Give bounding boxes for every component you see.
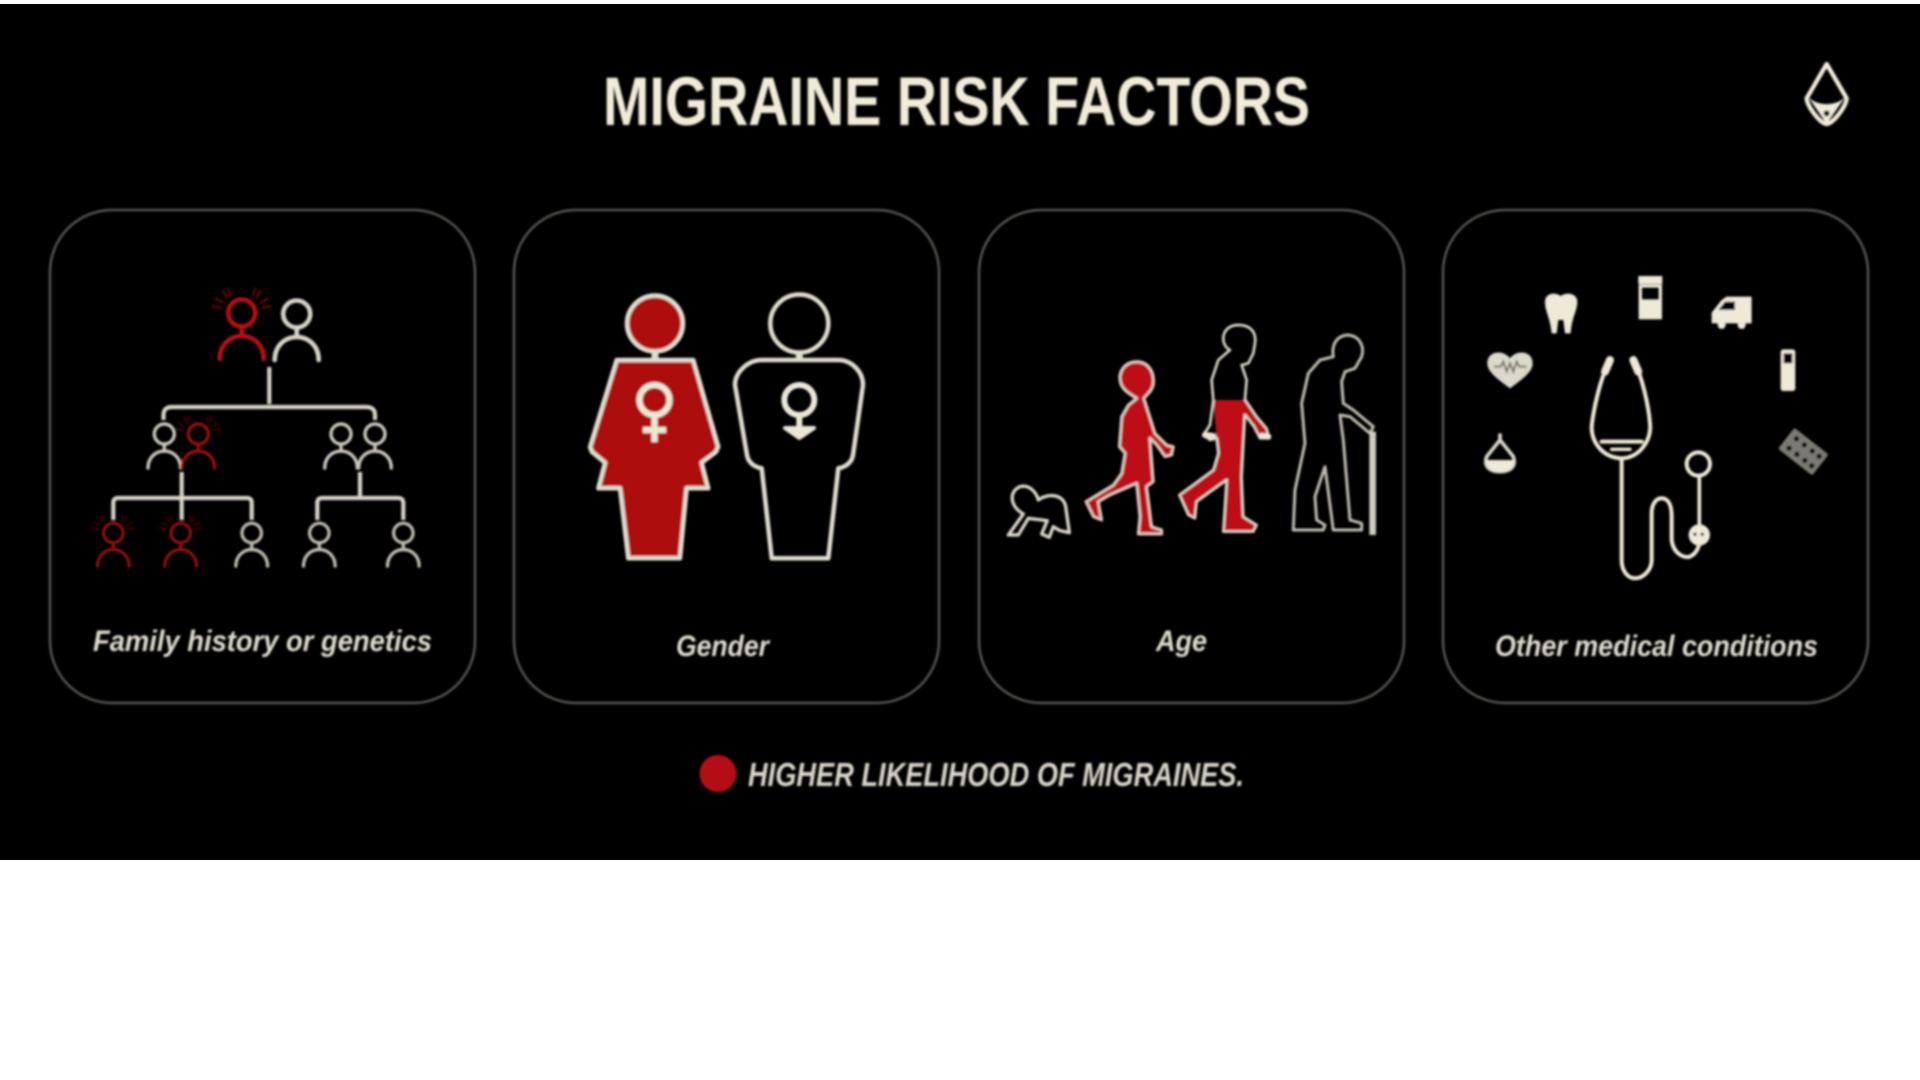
- icon: medicine bottle: [1638, 276, 1662, 318]
- icon: tooth: [1545, 294, 1577, 333]
- label: Gender: [676, 630, 771, 663]
- legend: [700, 755, 1244, 793]
- figure: adult: [1179, 325, 1269, 532]
- person: grandchildren: [236, 523, 419, 566]
- figure: elder with cane: [1293, 335, 1373, 535]
- icon: vial: [1781, 349, 1795, 391]
- symbol: mars: [784, 385, 814, 438]
- icon: flask: [1486, 433, 1514, 472]
- icon: ambulance: [1712, 297, 1752, 329]
- family tree icon: [92, 288, 419, 566]
- person: affected grandchildren: [92, 515, 202, 566]
- tree connectors: [113, 367, 403, 520]
- symbol: venus: [640, 385, 670, 442]
- person: affected parent: [212, 288, 272, 359]
- panel: other medical conditions: [1443, 210, 1868, 703]
- panel frame: [514, 210, 939, 703]
- background band: [0, 4, 1920, 860]
- panel: family history: [50, 210, 475, 703]
- figure: male: [735, 294, 863, 558]
- life stages icon: [1008, 325, 1373, 537]
- figure: female: [590, 296, 718, 558]
- panel: gender: [514, 210, 939, 703]
- person: parent: [275, 300, 319, 360]
- label: Other medical conditions: [1495, 630, 1818, 663]
- label: Age: [1155, 625, 1207, 658]
- medical icons: [1486, 276, 1829, 578]
- panel frame: [50, 210, 475, 703]
- title: MIGRAINE RISK FACTORS: [603, 63, 1310, 140]
- panel frame: [979, 210, 1404, 703]
- legend dot: [700, 755, 736, 792]
- icon: logo drop: [1807, 64, 1847, 124]
- person: child generation: [148, 424, 391, 468]
- figure: child: [1086, 362, 1173, 534]
- panel: age: [979, 210, 1404, 703]
- infographic content: [50, 63, 1868, 793]
- figure: baby: [1008, 486, 1069, 537]
- icon: stethoscope: [1592, 360, 1710, 578]
- icon: blister pack: [1778, 428, 1829, 475]
- panel frame: [1443, 210, 1868, 703]
- legend text: HIGHER LIKELIHOOD OF MIGRAINES.: [748, 756, 1244, 793]
- person: affected child generation: [176, 416, 220, 468]
- label: Family history or genetics: [93, 625, 432, 658]
- icon: heart: [1487, 352, 1533, 388]
